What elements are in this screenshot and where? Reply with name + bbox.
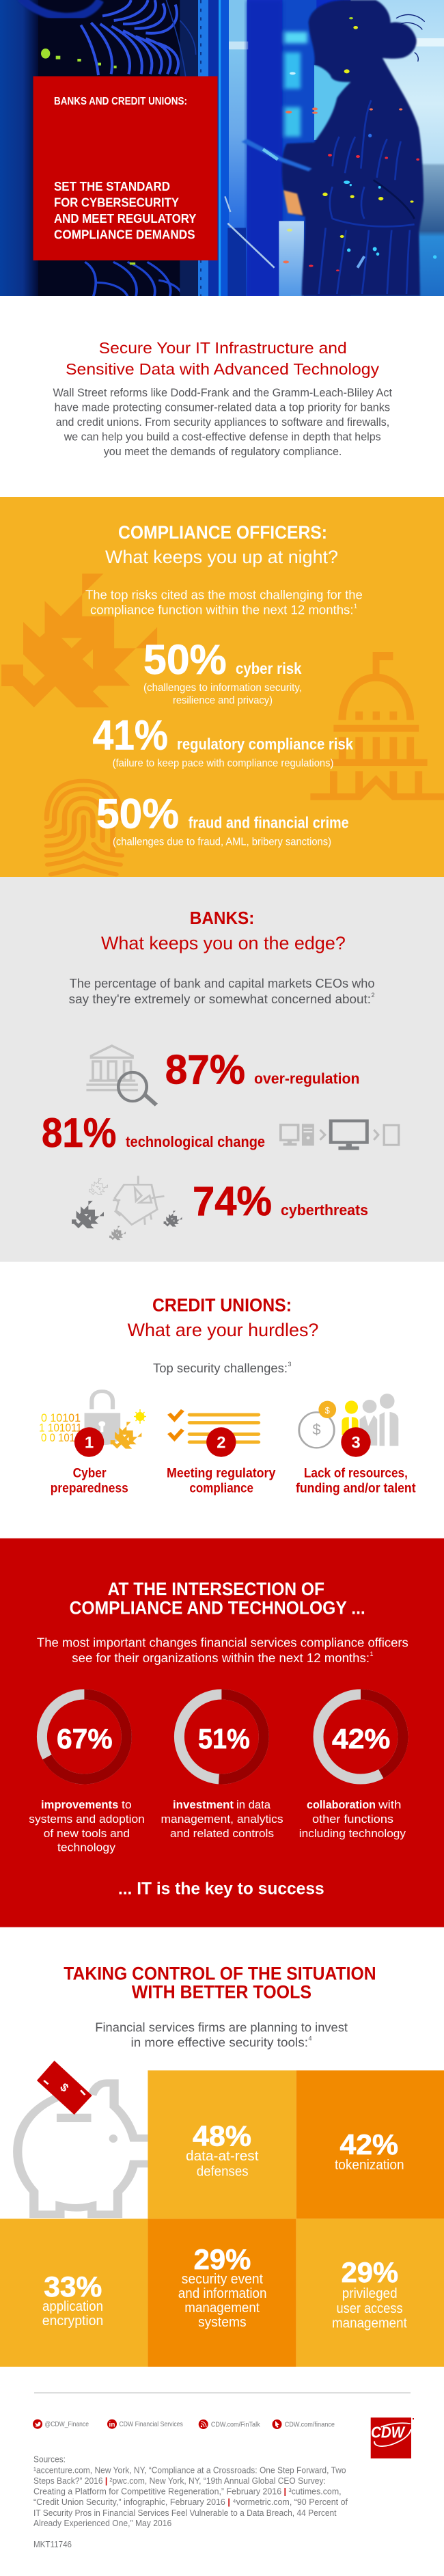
icon: lock and binary: 0 0 101 [41, 1431, 75, 1444]
panel: banks [0, 877, 444, 1262]
sources: Sources: [33, 2455, 66, 2465]
donut: 42%: 42% [332, 1723, 390, 1754]
intro body text [53, 387, 392, 458]
subheading: What keeps you on the edge? [101, 933, 346, 953]
sources: Steps Back?” 2016 | ²pwc.com, New York, NY, “19th Annual Global CEO Survey: [33, 2476, 326, 2486]
heading: BANKS: [190, 909, 254, 928]
intro body text: and credit unions. From security appliances to software and firewalls, [56, 416, 389, 429]
social: twitter [33, 2419, 89, 2429]
stat: cyber risk: (challenges to information security, [143, 682, 302, 694]
badge 1: 1 [85, 1434, 94, 1452]
tile: 33% application encryption [0, 2219, 148, 2367]
label: collaboration: including technology [299, 1827, 406, 1840]
stat: over-regulation: over-regulation [254, 1070, 359, 1087]
badge 3 [341, 1427, 371, 1457]
intro text: Financial services firms are planning to invest [95, 2020, 348, 2034]
icon: money and people: $ [325, 1405, 331, 1415]
sources: Creating a Platform for Competitive Regeneration,” February 2016 | ³cutimes.com, [33, 2486, 342, 2496]
label: investment: and related controls [170, 1827, 274, 1840]
donut: 51% [179, 1694, 264, 1779]
badge 3: 3 [351, 1434, 361, 1452]
intro text [37, 1636, 408, 1665]
sources: ¹accenture.com, New York, NY, “Compliance at a Crossroads: One Step Forward, Two [33, 2466, 346, 2476]
job code: MKT11746 [33, 2540, 72, 2549]
social: linkedin: CDW Financial Services [119, 2420, 183, 2428]
social: web: CDW.com/finance [285, 2421, 335, 2429]
panel: footer [0, 2367, 444, 2576]
tile: 29% SIEM: security event [182, 2272, 263, 2287]
icon: piggy bank [18, 2061, 148, 2214]
stat: regulatory compliance risk: (failure to keep pace with compliance regulations) [113, 758, 333, 770]
tile: 33% application encryption: 33% [44, 2270, 102, 2303]
intro text: 1 [354, 603, 357, 610]
stat: fraud and financial crime: 50% [96, 791, 179, 837]
stat: cyberthreats: 74% [193, 1178, 272, 1224]
tile: 33% application encryption: application [42, 2299, 103, 2314]
panel: intersection of compliance and technology [0, 1538, 444, 1927]
social: linkedin: in [109, 2421, 115, 2429]
label: cyber preparedness [51, 1467, 128, 1496]
stat: regulatory compliance risk: 41% [93, 712, 168, 759]
label: improvements: to [122, 1798, 132, 1811]
label: improvements: systems and adoption [29, 1813, 145, 1826]
intro text: The top risks cited as the most challenging for the [85, 588, 363, 602]
photo: server rack and cables [0, 0, 219, 296]
icon: money and people: $ [312, 1421, 321, 1438]
label: collaboration: collaboration [307, 1798, 376, 1811]
icon: lock and binary [39, 1392, 146, 1449]
label: investment: in data [236, 1798, 271, 1811]
intro text: see for their organizations within the next 12 months: [72, 1651, 370, 1665]
stat: cyber risk: 50% [143, 636, 227, 683]
label: improvements [29, 1798, 145, 1854]
label: lack of resources [296, 1467, 416, 1496]
intro text: 3 [288, 1361, 292, 1368]
icon: lock and binary: 1 101011 [39, 1421, 82, 1434]
social: twitter: @CDW_Finance [45, 2420, 89, 2428]
intro heading [66, 339, 379, 378]
intro heading: Sensitive Data with Advanced Technology [66, 360, 379, 378]
heading: WITH BETTER TOOLS [132, 1981, 311, 2002]
stat: over-regulation [165, 1047, 359, 1093]
donut: 42% [318, 1694, 403, 1779]
stat: regulatory compliance risk [93, 712, 353, 770]
badge 1 [74, 1427, 104, 1457]
social: linkedin [107, 2419, 183, 2429]
label: collaboration: other functions [312, 1813, 393, 1826]
sources [33, 2455, 348, 2528]
badge 2: 2 [217, 1434, 225, 1452]
tile: 29% privileged user access management: management [332, 2316, 407, 2331]
stat: fraud and financial crime: fraud and financial crime [189, 814, 349, 832]
intro text: in more effective security tools: [131, 2035, 308, 2049]
heading: TAKING CONTROL OF THE SITUATION [64, 1963, 376, 1983]
icon: money and people [299, 1394, 398, 1448]
donut: 67%: 67% [57, 1723, 113, 1754]
intro body text: have made protecting consumer-related data a top priority for banks [55, 402, 390, 414]
tile: 29% privileged user access management: privileged [342, 2286, 398, 2301]
tile: 29% SIEM: management [184, 2301, 260, 2316]
photo: technician silhouette [219, 0, 444, 296]
tile: 42% tokenization: 42% [340, 2128, 398, 2160]
intro text [85, 588, 363, 617]
icon: piggy bank: $ [57, 2080, 72, 2095]
logo: CDW: CDW [371, 2424, 406, 2441]
heading: COMPLIANCE OFFICERS: [118, 522, 327, 543]
intro text: say they're extremely or somewhat concerned about: [69, 992, 371, 1006]
label: investment [161, 1798, 283, 1840]
closing line: ... IT is the key to success [118, 1880, 324, 1899]
label: investment: management, analytics [161, 1813, 283, 1826]
stat: cyber risk [143, 636, 302, 706]
panel: hero photo [0, 0, 444, 296]
badge 2 [206, 1427, 236, 1457]
title: COMPLIANCE DEMANDS [54, 227, 195, 242]
icon: devices [281, 1121, 399, 1150]
sources: Already Experienced One,” May 2016 [33, 2519, 171, 2528]
tile: 48% data-at-rest defenses: 48% [193, 2119, 251, 2152]
title: SET THE STANDARD [54, 179, 170, 193]
stat: cyberthreats: cyberthreats [281, 1202, 368, 1219]
title [54, 179, 197, 242]
heading [70, 1579, 365, 1618]
stat: cyber risk: cyber risk [236, 660, 302, 677]
icon: lock and binary: 0 10101 [41, 1411, 81, 1424]
icon: cyberthreats [72, 1176, 182, 1240]
stat: fraud and financial crime [96, 791, 349, 848]
tile: 29% privileged user access management: user access [336, 2301, 403, 2316]
sources: IT Security Pros in Financial Services Feel Vulnerable to a Data Breach, 44 Percent [33, 2508, 337, 2518]
intro body text: you meet the demands of regulatory compliance. [104, 446, 342, 458]
tile: 42% tokenization [296, 2070, 444, 2219]
heading [64, 1963, 376, 2002]
label: regulatory compliance: compliance [189, 1482, 253, 1496]
tile: 29% SIEM [148, 2219, 296, 2367]
intro body text: Wall Street reforms like Dodd-Frank and the Gramm-Leach-Bliley Act [53, 387, 392, 399]
tile: 29% SIEM: 29% [194, 2243, 251, 2275]
intro heading: Secure Your IT Infrastructure and [99, 339, 347, 357]
stat: over-regulation: 87% [165, 1047, 245, 1093]
intro text: 4 [309, 2035, 312, 2042]
label: improvements: technology [57, 1841, 116, 1854]
tile: 33% application encryption: encryption [42, 2314, 103, 2329]
tile: 29% SIEM: and information [178, 2286, 266, 2301]
label: cyber preparedness: Cyber [73, 1467, 107, 1481]
label: collaboration [299, 1798, 406, 1840]
title: FOR CYBERSECURITY [54, 195, 180, 209]
intro text: 2 [372, 992, 375, 999]
label: cyber preparedness: preparedness [51, 1482, 128, 1496]
stat: technological change [42, 1110, 265, 1156]
tile: 29% privileged user access management [296, 2219, 444, 2367]
icon: virus background [1, 573, 157, 707]
tile: 29% SIEM: systems [198, 2315, 247, 2330]
intro text: The percentage of bank and capital markets CEOs who [70, 977, 374, 990]
label: regulatory compliance: Meeting regulatory [167, 1467, 276, 1481]
heading: AT THE INTERSECTION OF [108, 1579, 324, 1599]
tile: 42% tokenization: tokenization [335, 2158, 404, 2173]
stat: regulatory compliance risk: regulatory compliance risk [177, 735, 353, 753]
logo: CDW [371, 2417, 414, 2458]
panel: credit unions [0, 1262, 444, 1538]
tile: 29% privileged user access management: 29% [342, 2256, 398, 2288]
intro text: Top security challenges: [153, 1361, 288, 1375]
intro body text: we can help you build a cost-effective defense in depth that helps [64, 431, 381, 443]
heading: CREDIT UNIONS: [152, 1295, 292, 1316]
panel: better tools [0, 1927, 444, 2367]
sources: “Credit Union Security,” infographic, February 2016 | ⁴vormetric.com, “90 Percent of [33, 2497, 348, 2507]
donut: 51%: 51% [198, 1723, 250, 1754]
label: lack of resources: funding and/or talent [296, 1482, 416, 1496]
social: rss [199, 2419, 260, 2429]
intro text [69, 977, 375, 1006]
subheading: What are your hurdles? [128, 1320, 318, 1340]
title: AND MEET REGULATORY [54, 211, 197, 226]
icon: bank under magnifier [86, 1046, 156, 1105]
icon: checklist [169, 1410, 258, 1442]
tile: 48% data-at-rest defenses [148, 2070, 296, 2219]
stat: technological change: 81% [42, 1110, 116, 1156]
icon: fingerprint background [46, 781, 122, 874]
label: improvements: of new tools and [44, 1827, 130, 1840]
stat: fraud and financial crime: (challenges due to fraud, AML, bribery sanctions) [113, 837, 331, 848]
heading: COMPLIANCE AND TECHNOLOGY ... [70, 1598, 365, 1618]
label: collaboration: with [378, 1798, 402, 1811]
intro text: 1 [370, 1651, 374, 1657]
intro text: The most important changes financial services compliance officers [37, 1636, 408, 1650]
intro text [95, 2020, 348, 2049]
icon: capitol background [310, 652, 444, 800]
donut: 67% [42, 1694, 126, 1779]
panel: intro [0, 296, 444, 497]
panel: compliance officers [0, 497, 444, 877]
label: improvements: improvements [41, 1798, 118, 1811]
tile: 48% data-at-rest defenses: data-at-rest [186, 2149, 259, 2164]
social: rss: CDW.com/FinTalk [211, 2421, 260, 2429]
label: investment: investment [173, 1798, 234, 1811]
eyebrow: BANKS AND CREDIT UNIONS: [54, 96, 187, 107]
social: web [272, 2419, 335, 2429]
subheading: What keeps you up at night? [105, 547, 338, 567]
intro text: compliance function within the next 12 months: [90, 603, 354, 617]
tile: 48% data-at-rest defenses: defenses [197, 2164, 249, 2179]
stat: cyber risk: resilience and privacy) [173, 694, 273, 706]
stat: cyberthreats [193, 1178, 368, 1224]
label: lack of resources: Lack of resources, [304, 1467, 408, 1481]
stat: technological change: technological change [126, 1133, 265, 1150]
label: regulatory compliance [167, 1467, 276, 1496]
panel: red title box [33, 77, 217, 260]
